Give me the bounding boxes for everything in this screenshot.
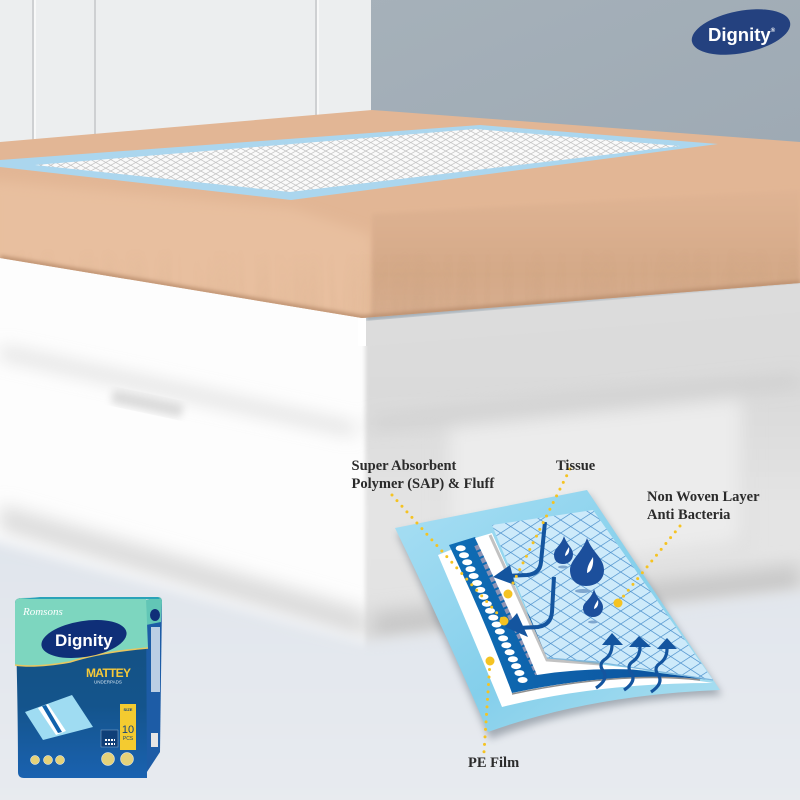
white tissue layer [475, 533, 713, 678]
blue SAP layer [449, 537, 713, 694]
package size badge: 10 [122, 724, 134, 736]
floor [0, 536, 800, 800]
package badges [30, 752, 134, 766]
label: PE film: PE Film [468, 755, 519, 771]
bed frame [0, 250, 800, 660]
package brand: Romsons [22, 606, 63, 618]
non woven layer [492, 510, 713, 680]
downward bent arrows [505, 522, 554, 628]
upward wavy arrows [596, 633, 677, 692]
mattress with peach fitted sheet [0, 100, 800, 330]
package front [15, 597, 147, 778]
white absorbent layer [438, 540, 713, 707]
product package [15, 597, 162, 778]
logo: Dignity: Dignity [708, 24, 771, 45]
package size badge: SIZE [124, 707, 133, 712]
callout lines and dots [392, 469, 680, 752]
drawer handle [111, 389, 184, 418]
package logo: Dignity [55, 631, 113, 650]
label: super absorbent: Polymer (SAP) & Fluff [352, 476, 494, 492]
drop shadow [397, 495, 722, 739]
package side panel [143, 597, 162, 778]
layer diagram [395, 490, 722, 739]
package side details [150, 609, 160, 747]
underpad on mattress [0, 125, 718, 200]
label: non woven: Non Woven Layer [647, 489, 760, 505]
package logo [39, 614, 129, 664]
label: super absorbent: Super Absorbent [352, 458, 456, 474]
package mini diagram [25, 695, 93, 740]
logo: Dignity [688, 2, 794, 62]
sharp top rail [366, 284, 800, 346]
label: non woven: Anti Bacteria [647, 507, 731, 523]
blurred drawer details [0, 352, 800, 640]
bed frame, left side [0, 250, 365, 660]
PE film layer [395, 490, 720, 732]
package dot panel [101, 730, 118, 747]
package size badge [120, 704, 136, 750]
label: tissue: Tissue [556, 458, 596, 474]
package product name: MATTEY [86, 666, 131, 680]
logo: Dignity: ® [771, 27, 776, 34]
droplets [554, 536, 604, 624]
package size badge: PCS [123, 736, 134, 742]
product package: UNDERPADS [94, 680, 122, 684]
bed frame, right side [365, 280, 800, 660]
background: wall and headboard [0, 0, 800, 330]
package mint top [15, 597, 148, 666]
